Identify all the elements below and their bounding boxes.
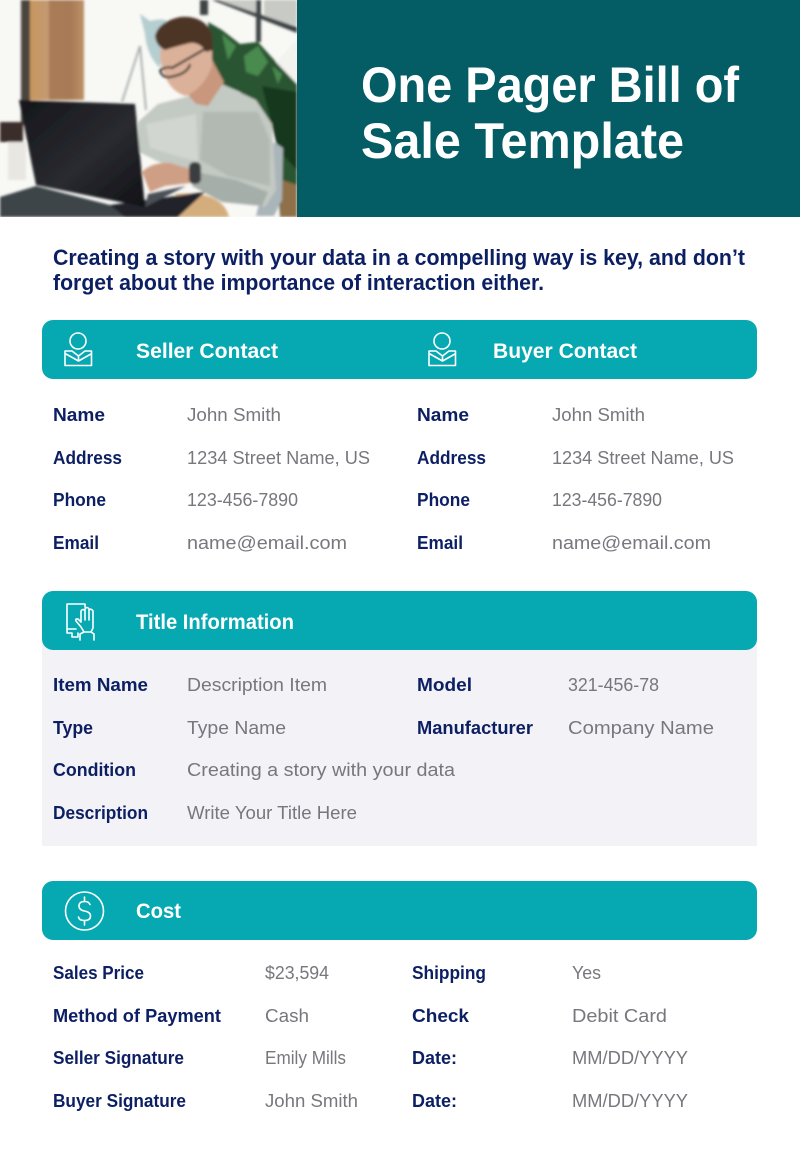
- plant: [208, 22, 297, 217]
- title information fields: Manufacturer: [417, 718, 533, 738]
- buyer details: 1234 Street Name, US: [552, 447, 734, 468]
- seller details: Phone: [53, 490, 106, 510]
- buyer details: 123-456-7890: [552, 489, 662, 510]
- icon: seller contact: [65, 333, 92, 366]
- title information fields: Creating a story with your data: [187, 759, 456, 780]
- cost details: Emily Mills: [265, 1047, 346, 1068]
- buyer details: Email: [417, 533, 463, 553]
- cost details: $23,594: [265, 962, 329, 983]
- seller details: John Smith: [187, 404, 281, 425]
- heading: cost: Cost: [136, 899, 181, 923]
- title information fields: Item Name: [53, 675, 148, 695]
- title information fields: Condition: [53, 760, 136, 780]
- title information fields: Description: [53, 803, 148, 823]
- icon: dollar coin: [66, 892, 104, 930]
- neck: [188, 60, 226, 107]
- cost details: [53, 962, 688, 1111]
- title: Sale Template: [361, 113, 684, 169]
- heading: seller contact: Seller Contact: [136, 339, 278, 363]
- title: [361, 57, 739, 169]
- title information fields: 321-456-78: [568, 674, 659, 695]
- header banner: [297, 0, 800, 217]
- hand and watch: [142, 163, 190, 192]
- window frame and wood column: [21, 0, 30, 125]
- lamp: [140, 14, 167, 68]
- buyer details: Address: [417, 448, 486, 468]
- chair: [256, 142, 283, 216]
- buyer details: Name: [417, 405, 469, 425]
- cost details: Date:: [412, 1091, 457, 1111]
- buyer details: [417, 404, 734, 553]
- cost details: Debit Card: [572, 1005, 667, 1026]
- intro text: [53, 245, 746, 295]
- cost details: Cash: [265, 1005, 309, 1026]
- seller details: Name: [53, 405, 105, 425]
- cost details: Sales Price: [53, 963, 144, 983]
- title information fields: Model: [417, 675, 472, 695]
- title information fields: Type: [53, 718, 93, 738]
- face: [160, 39, 212, 96]
- cost details: Seller Signature: [53, 1048, 184, 1068]
- seller details: name@email.com: [187, 532, 347, 553]
- icon: hand on book: [67, 604, 94, 640]
- cost details: Yes: [572, 962, 601, 983]
- panel: contact header bar: [42, 320, 757, 379]
- cost details: Buyer Signature: [53, 1091, 186, 1111]
- buyer details: John Smith: [552, 404, 645, 425]
- cost details: MM/DD/YYYY: [572, 1047, 688, 1068]
- title information fields: Company Name: [568, 717, 714, 738]
- hair: [155, 17, 213, 52]
- icon: buyer contact: [429, 333, 456, 366]
- cost details: Check: [412, 1006, 470, 1026]
- buyer details: name@email.com: [552, 532, 711, 553]
- top right window: [200, 0, 208, 15]
- cost details: Shipping: [412, 963, 486, 983]
- buyer details: Phone: [417, 490, 470, 510]
- heading: title information: Title Information: [136, 610, 294, 634]
- title information fields: Description Item: [187, 674, 327, 695]
- intro text: Creating a story with your data in a compelling way is key, and don’t: [53, 245, 746, 270]
- cost details: Date:: [412, 1048, 457, 1068]
- seller details: 123-456-7890: [187, 489, 298, 510]
- cost details: John Smith: [265, 1090, 358, 1111]
- table: [0, 186, 130, 217]
- seller details: Email: [53, 533, 99, 553]
- laptop: [19, 100, 145, 207]
- cost details: Method of Payment: [53, 1006, 221, 1026]
- title information fields: [53, 674, 714, 823]
- title: One Pager Bill of: [361, 57, 739, 113]
- heading: buyer contact: Buyer Contact: [493, 339, 637, 363]
- title information fields: Type Name: [187, 717, 286, 738]
- panel: title information: [42, 591, 757, 846]
- cost details: MM/DD/YYYY: [572, 1090, 688, 1111]
- panel: cost header bar: [42, 881, 757, 940]
- glasses: [160, 49, 205, 77]
- intro text: forget about the importance of interaction either.: [53, 270, 544, 295]
- seller details: 1234 Street Name, US: [187, 447, 370, 468]
- seller details: [53, 404, 370, 553]
- photo: man working on laptop: [0, 0, 297, 217]
- shirt: [138, 84, 276, 207]
- seller details: Address: [53, 448, 122, 468]
- title information fields: Write Your Title Here: [187, 802, 357, 823]
